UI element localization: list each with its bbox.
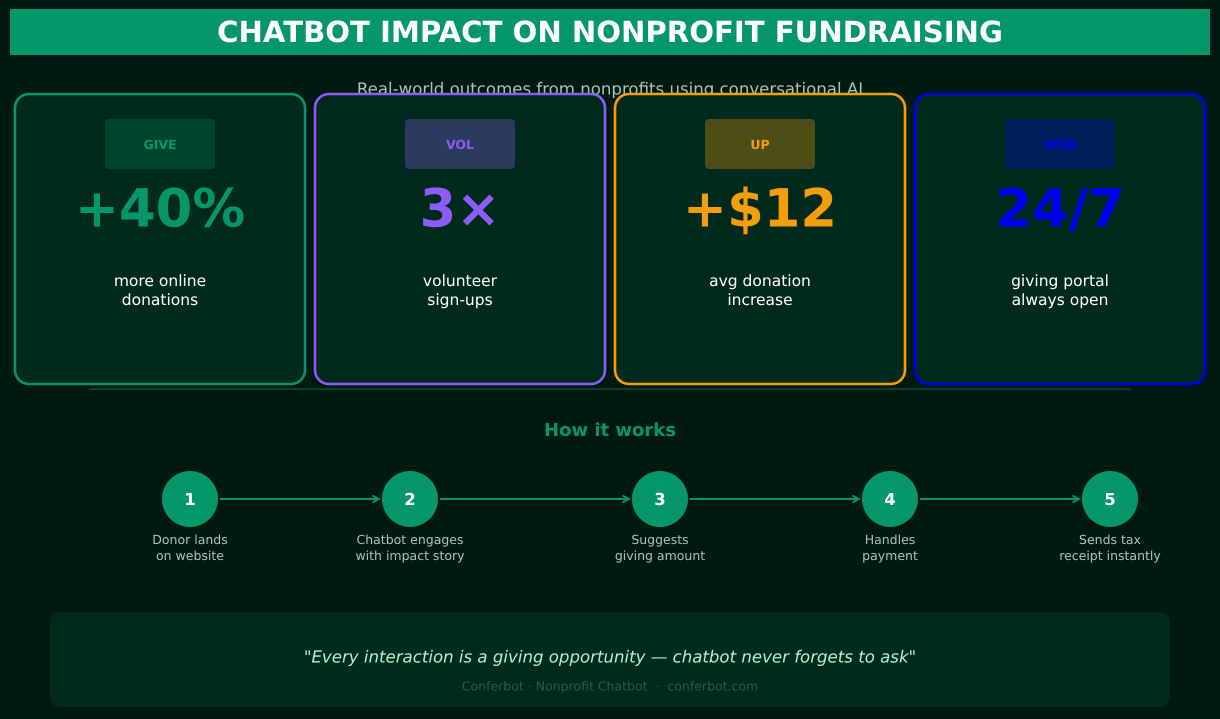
description: always open (1012, 291, 1108, 309)
step 5: 5 (1104, 490, 1116, 509)
quote panel (50, 612, 1170, 707)
panel: more online donations (15, 94, 305, 384)
description: increase (727, 291, 793, 309)
description: volunteer (423, 272, 498, 290)
icon: VOL badge: VOL (446, 137, 474, 152)
description: donations (122, 291, 198, 309)
panel: volunteer sign-ups (315, 94, 605, 384)
step 5: receipt instantly (1059, 548, 1161, 563)
step 1 (152, 471, 228, 563)
icon: VOL badge (405, 119, 515, 169)
step 2 (355, 471, 465, 563)
quote: "Every interaction is a giving opportunity — chatbot never forgets to ask" (304, 648, 916, 666)
icon: WEB badge (1005, 119, 1115, 169)
icon: UP badge: UP (750, 137, 770, 152)
step 2: Chatbot engages (356, 532, 464, 547)
panel: avg donation increase (615, 94, 905, 384)
panel: giving portal always open (915, 94, 1205, 384)
step 1: 1 (184, 490, 196, 509)
description: more online (114, 272, 206, 290)
description: sign-ups (427, 291, 493, 309)
icon: GIVE badge (105, 119, 215, 169)
icon: WEB badge: WEB (1044, 137, 1076, 152)
title banner (10, 9, 1210, 55)
description: avg donation (709, 272, 811, 290)
step 1: Donor lands (152, 532, 228, 547)
subtitle: Real-world outcomes from nonprofits using conversational AI (357, 80, 863, 98)
arrow: step 4 to 5 (920, 498, 1079, 500)
stat: +$12: +$12 (683, 178, 837, 240)
step 2: 2 (404, 490, 416, 509)
title banner: CHATBOT IMPACT ON NONPROFIT FUNDRAISING (217, 15, 1003, 49)
footer credit: Conferbot · Nonprofit Chatbot · conferbot.com (462, 678, 758, 694)
step 4: 4 (884, 490, 896, 509)
step 2: with impact story (355, 548, 465, 563)
section heading: how it works: How it works (544, 420, 676, 441)
step 3 (615, 471, 705, 563)
description: giving portal (1011, 272, 1109, 290)
stat: 24/7: 24/7 (995, 178, 1125, 240)
step 4 (862, 471, 918, 563)
arrow: step 1 to 2 (220, 498, 379, 500)
stat: 3x: 3× (420, 178, 500, 240)
icon: UP badge (705, 119, 815, 169)
arrow: step 2 to 3 (440, 498, 629, 500)
icon: GIVE badge: GIVE (143, 137, 177, 152)
step 3: giving amount (615, 548, 705, 563)
step 5 (1059, 471, 1161, 563)
step 3: Suggests (631, 532, 689, 547)
step 1: on website (156, 548, 224, 563)
step 4: Handles (865, 532, 915, 547)
arrow: step 3 to 4 (690, 498, 859, 500)
stat: +40%: +40% (75, 178, 245, 240)
step 4: payment (862, 548, 918, 563)
step 5: Sends tax (1079, 532, 1141, 547)
step 3: 3 (654, 490, 666, 509)
